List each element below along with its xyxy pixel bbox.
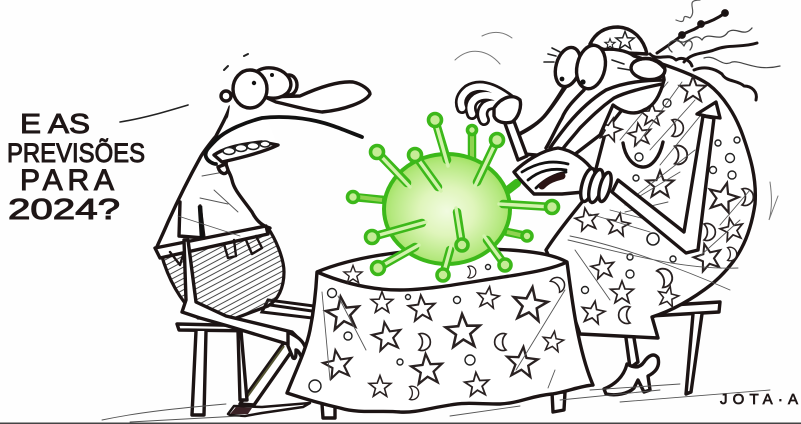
man: arm (182, 240, 302, 346)
fortune teller: stool (650, 302, 720, 394)
man: hand (288, 332, 306, 359)
man: far leg and shoe (228, 300, 314, 416)
fortune teller: robe (546, 64, 755, 338)
virus: spikes behind body (353, 130, 527, 236)
fortune teller: hair curls (650, 0, 780, 100)
speech text: E as previsões para 2024?: PREVISÕES (7, 137, 145, 168)
man: trousers (160, 228, 284, 318)
fortune teller: neckline (623, 142, 663, 167)
coronavirus crystal ball (348, 114, 558, 281)
man at the stool (155, 54, 370, 416)
man: torso (156, 107, 270, 249)
speech text: E as previsões para 2024?: PARA (20, 164, 114, 197)
speech text: E as previsões para 2024?: E AS (20, 108, 90, 139)
fortune teller: face and long nose (519, 43, 666, 158)
table: cloth (287, 249, 593, 412)
signature: JOTA·A (720, 391, 798, 408)
fortune teller: leg and high-heel shoe (604, 338, 659, 395)
table: legs (322, 392, 565, 418)
robe: star and moon print (574, 76, 753, 325)
man: stool (177, 324, 263, 415)
fortune teller: raised hand and arm (461, 87, 527, 160)
man: sleeve (179, 202, 204, 238)
motion marks (455, 32, 778, 220)
virus: body (384, 154, 510, 264)
bottom edge line (0, 422, 801, 424)
speech text: E as previsões para 2024?: 2024? (8, 194, 120, 226)
man: head and snout (205, 54, 370, 174)
floor sketch lines (102, 384, 770, 422)
robe: forearm triangle (612, 102, 720, 253)
fortune teller: turban (590, 27, 647, 54)
table: star and moon print (309, 264, 568, 400)
tablecloth table (287, 249, 593, 418)
virus: spikes in front (348, 114, 558, 281)
fortune teller: lower hand and bracelets (514, 148, 614, 204)
man: belt (155, 226, 268, 258)
woman: eye right (630, 57, 666, 81)
robe: shading lines (568, 82, 750, 300)
woman: eye middle (573, 43, 609, 91)
woman: eye left (551, 45, 585, 89)
speech text: E as previsões para 2024? (7, 108, 145, 226)
speech line (120, 105, 188, 122)
